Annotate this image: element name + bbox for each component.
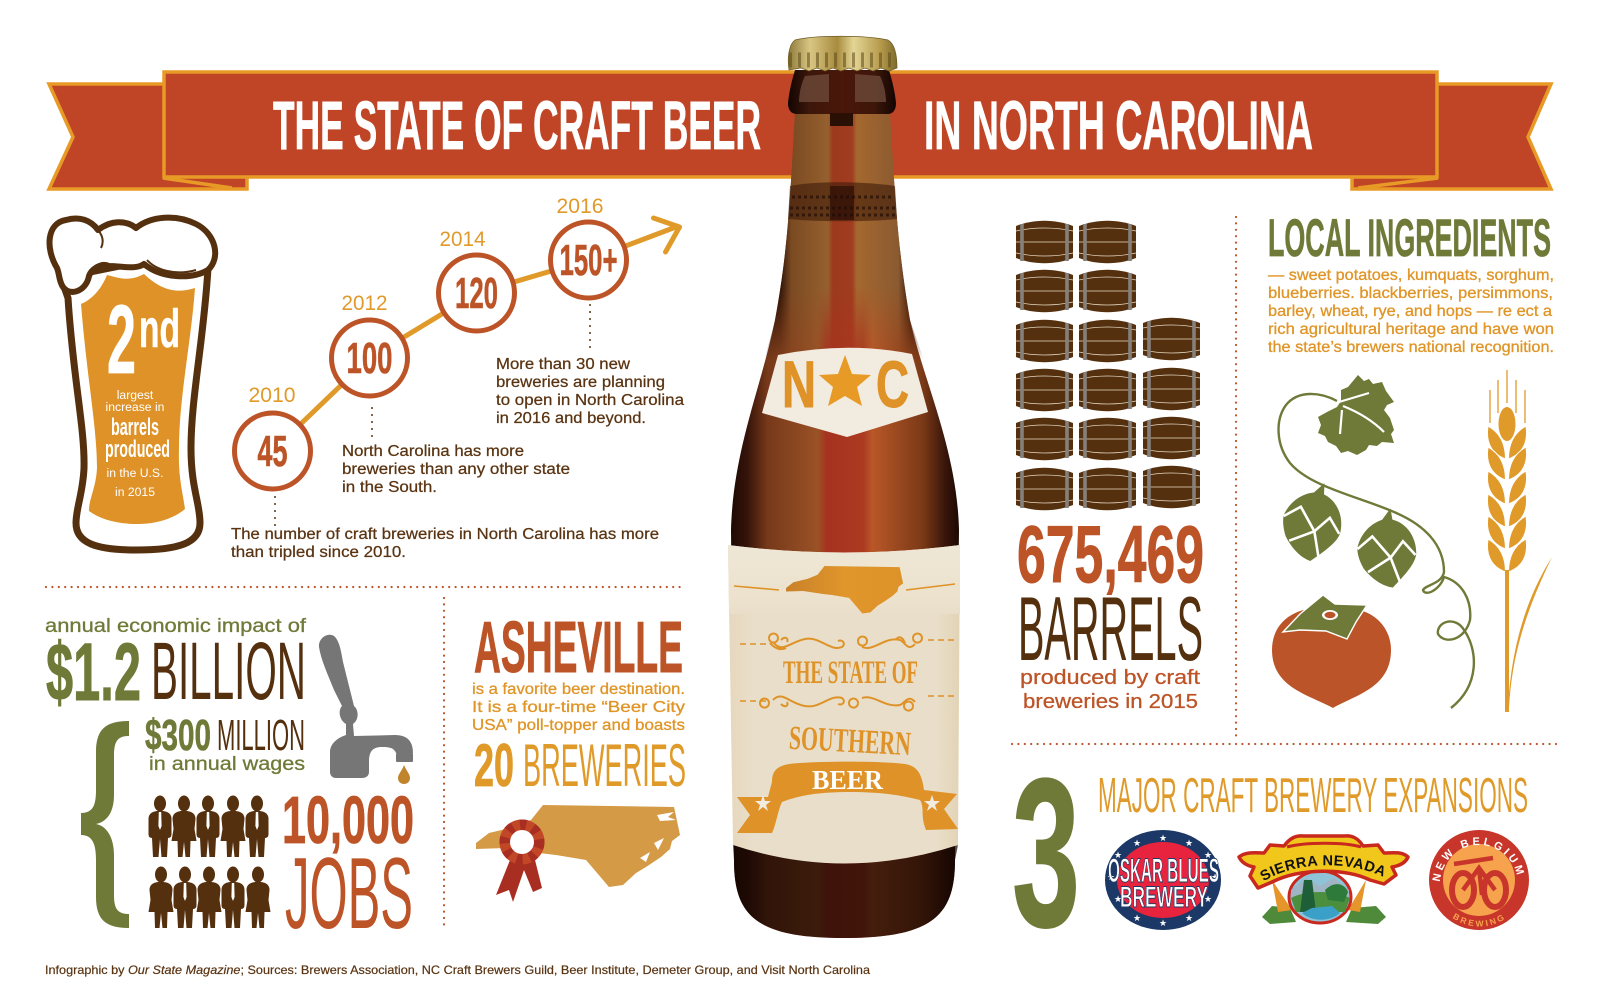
icon: hop cone left [1279,479,1346,564]
logo: Oskar Blues: ★ [1107,872,1115,882]
wages caption: in annual wages [149,753,305,775]
note: 2016: in 2016 and beyond. [496,410,646,427]
glass caption: in 2015 [115,485,155,499]
point 2012 [332,292,408,396]
logo: Oskar Blues: ★ [1211,872,1219,882]
barrels caption [1020,667,1201,713]
trend arrow [272,218,680,451]
label flourishes [740,634,955,711]
icon: beer tap [319,635,413,784]
growth line chart [234,195,680,489]
panel: brewery expansions [1012,734,1529,971]
label line: the state of: THE STATE OF [783,655,918,691]
bottle base shade [733,845,958,938]
note: 2012: breweries than any other state [342,461,570,478]
ingredients text: rich agricultural heritage and have won [1268,321,1554,338]
impact value: $1.2 [46,627,141,718]
neck label [762,347,928,437]
panel: local ingredients [1268,209,1554,712]
ingredients text: blueberries. blackberries, persimmons, [1268,285,1553,302]
wages value: $300 [145,711,211,760]
logo: Oskar Blues: ★ [1204,850,1212,860]
logo: Oskar Blues: ★ [1185,838,1193,848]
point 2016: 150+ [560,236,618,285]
panel: Asheville [472,608,686,902]
scroll banner [1239,836,1408,888]
glass caption: largest [117,388,154,402]
note: 2016: breweries are planning [496,374,665,391]
ingredients text: barley, wheat, rye, and hops — re ect a [1268,303,1552,320]
text: JOBS [285,838,413,950]
expansions number: 3 [1012,734,1080,971]
point 2010 [234,384,310,489]
panel: brewery expansions: OSKAR BLUES [1108,852,1219,890]
icon: wheat [1487,370,1552,712]
glass outline [61,248,208,550]
point 2014 [438,228,514,331]
scroll shading [1287,843,1361,847]
logo: Oskar Blues: ★ [1114,850,1122,860]
Asheville text: USA” poll-topper and boasts [472,717,685,734]
banner left tail [49,84,247,189]
jobs value: 10,000 [282,783,414,858]
icon: hop leaf [1318,375,1394,455]
ingredients text [1268,267,1554,356]
banner main band [164,72,1437,177]
beer level bubbles [788,182,897,221]
glass caption: barrels [111,414,159,441]
point 2010: 2010 [248,384,296,407]
point 2016: 2016 [556,195,604,218]
main label [728,545,960,864]
point 2014: 120 [455,269,498,318]
bottle glass [731,113,959,938]
logo: Oskar Blues: ★ [1159,918,1167,928]
point 2016 [550,195,626,298]
NC map [476,805,680,887]
glass heading 2nd: 2 [107,285,136,394]
logo: Oskar Blues: ★ [1159,833,1167,843]
barrels caption: produced by craft [1020,667,1201,689]
point 2014: 2014 [440,228,486,251]
panel: barrels produced [1016,221,1204,713]
label line: southern: SOUTHERN [788,720,912,763]
Asheville heading: ASHEVILLE [474,608,683,688]
logo: New Belgium: NEW BELGIUM [1432,837,1524,882]
glass caption: in the U.S. [107,466,163,480]
bottle [728,36,960,938]
pictogram: workers [148,796,270,928]
note: 2010: The number of craft breweries in North Carolina has more [231,526,659,543]
scroll text: SIERRA NEVADA [1260,855,1384,880]
panel: economic impact: BILLION [151,626,306,717]
logo: Oskar Blues: ★ [1114,894,1122,904]
hop leaves [1262,906,1386,924]
label ribbon: BEER [812,765,883,795]
landscape roundel [1289,871,1351,923]
wheat [1272,880,1366,912]
neck label: C [876,347,909,421]
text: BARRELS [1018,579,1203,680]
banner right tail [1352,84,1551,189]
icon: hop cone right [1353,506,1420,591]
impact caption: annual economic impact of [45,615,307,637]
note: 2012: in the South. [342,479,437,496]
banner fold right [1358,178,1438,188]
banner [49,72,1551,189]
logo: Oskar Blues [1105,830,1221,930]
note: 2012: North Carolina has more [342,443,524,460]
point 2012: 2012 [342,292,388,315]
logo: New Belgium [1429,830,1529,930]
point 2012: 100 [346,334,392,383]
Asheville text: is a favorite beer destination. [472,681,685,698]
barrels caption: breweries in 2015 [1023,691,1198,713]
logo: Oskar Blues: ★ [1204,894,1212,904]
panel: economic impact [45,615,414,950]
logo: Sierra Nevada [1237,834,1410,924]
glass caption [105,388,170,499]
note: 2010: than tripled since 2010. [231,544,406,561]
glass caption: produced [105,436,170,463]
icon: award ribbon [496,825,542,902]
note: 2016: More than 30 new [496,356,631,373]
icon: persimmon [1272,595,1391,708]
note: 2016 [496,356,684,427]
logo: Oskar Blues: ★ [1185,913,1193,923]
point 2010: 45 [258,427,288,476]
banner fold left [163,178,232,188]
bottle neck tone [764,113,924,360]
glass heading 2nd: nd [139,299,180,359]
pictogram: barrels [1016,221,1200,510]
panel: economic impact: MILLION [217,711,305,760]
bottle cap [788,36,897,71]
bottle lip [788,70,896,126]
title left: THE STATE OF CRAFT BEER [273,87,761,164]
logo: Oskar Blues: ★ [1133,838,1141,848]
note: 2012 [342,443,570,496]
glass caption: increase in [106,400,164,414]
beer glass [50,218,215,550]
Asheville text: It is a four-time “Beer City [472,699,685,716]
Asheville text [472,681,685,734]
label ribbon [737,762,958,833]
note: 2016: to open in North Carolina [496,392,684,409]
ingredients text: — sweet potatoes, kumquats, sorghum, [1268,267,1554,284]
foam [50,218,215,292]
hop vine [1279,394,1474,708]
note: 2010 [231,526,659,561]
ingredients text: the state’s brewers national recognition. [1268,339,1554,356]
neck label: N [782,347,816,421]
logo: Oskar Blues: ★ [1133,913,1141,923]
breweries value: 20 [474,732,514,799]
text: BREWERIES [523,732,686,799]
barrels value: 675,469 [1017,510,1204,600]
beer fill [81,274,195,524]
logo: New Belgium: BREWING [1452,913,1504,927]
foam crease [98,230,196,272]
brace [81,721,129,928]
footer credit: Infographic by Our State Magazine ; Sources: Brewers Association, NC Craft Brewers Guild, Beer Institute, Demeter Group, and Visit North Carolina [45,964,871,977]
logo: Oskar Blues: BREWERY [1120,881,1208,914]
label NC map [734,566,955,614]
